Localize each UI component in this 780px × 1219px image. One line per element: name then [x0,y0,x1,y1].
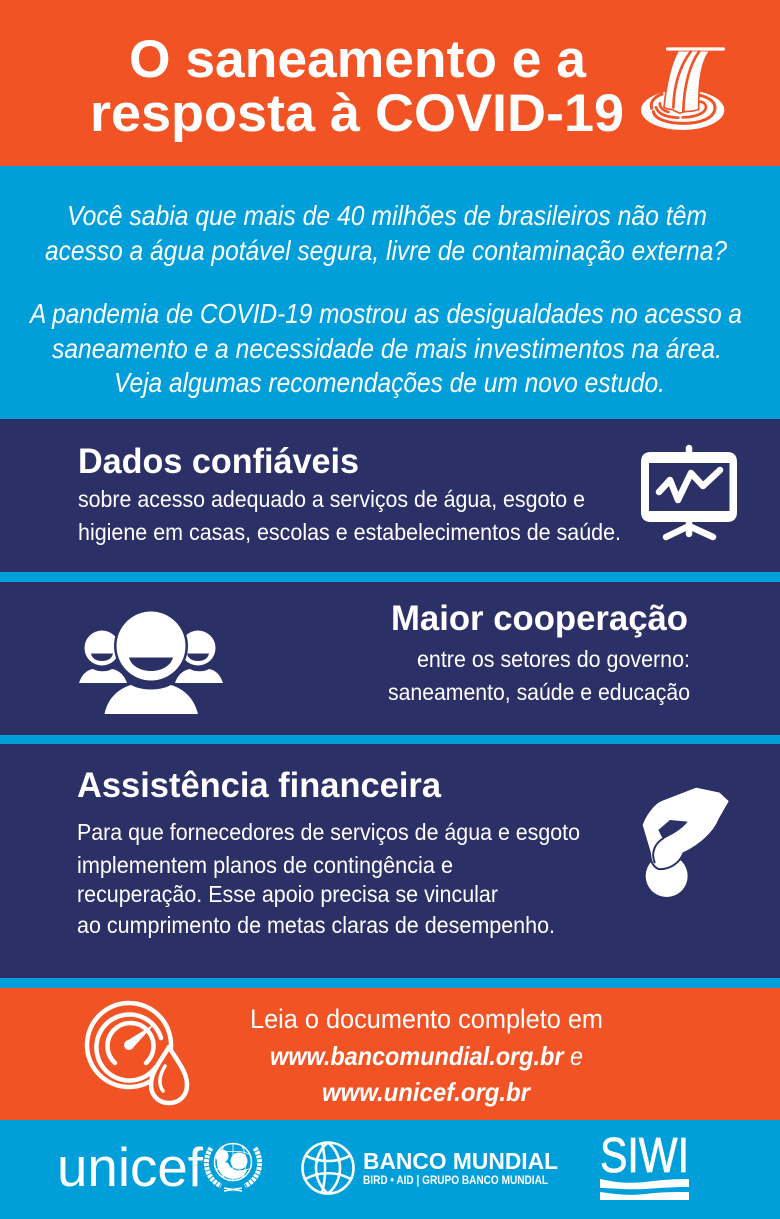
logo: unicef: unicef [57,1136,204,1198]
call to action text: www.bancomundial.org.br e [270,1041,583,1071]
intro text: Veja algumas recomendações de um novo estudo. [114,367,665,398]
icon: world bank globe [302,1142,354,1194]
logo: banco mundial: BIRD • AID | GRUPO BANCO MUNDIAL [363,1175,548,1187]
call to action text [250,1004,603,1107]
icon: gauge and water drop [87,1003,187,1103]
logo: SIWI [600,1129,689,1200]
title: O saneamento e a [129,30,587,89]
text: dados confiáveis: higiene em casas, escolas e estabelecimentos de saúde. [78,519,621,545]
text: assistência financeira: ao cumprimento de metas claras de desempenho. [77,912,555,938]
header panel [0,0,780,166]
panel: assistência financeira [0,744,780,978]
heading: assistência financeira: Assistência financeira [77,766,442,805]
panel: dados confiáveis [0,419,780,572]
icon: people [79,609,223,714]
panel: read more [0,988,780,1120]
intro text: saneamento e a necessidade de mais investimentos na área. [52,333,722,364]
heading: maior cooperação: Maior cooperação [391,599,688,638]
icon: presentation chart [641,448,737,537]
icon: waterfall [641,47,725,130]
text: dados confiáveis: sobre acesso adequado a serviços de água, esgoto e [78,486,585,512]
panel: maior cooperação [0,582,780,735]
title: resposta à COVID-19 [90,84,624,143]
text: assistência financeira: Para que fornecedores de serviços de água e esgoto [77,819,580,845]
logo: banco mundial [302,1142,558,1194]
text: maior cooperação: entre os setores do governo: [417,646,690,672]
logo: banco mundial: BANCO MUNDIAL [363,1148,558,1174]
text: dados confiáveis [78,486,621,545]
text: maior cooperação: saneamento, saúde e educação [388,679,690,705]
text: assistência financeira [77,819,580,938]
intro text: Você sabia que mais de 40 milhões de brasileiros não têm [67,200,707,231]
text: assistência financeira: implementem planos de contingência e [77,852,453,878]
call to action text: www.unicef.org.br [322,1077,532,1107]
text: assistência financeira: recuperação. Esse apoio precisa se vincular [77,881,498,907]
icon: unicef emblem [206,1144,260,1191]
intro text [28,200,742,398]
title [90,30,624,143]
icon: hand with coin [642,787,730,897]
logo: SIWI: SIWI [600,1129,689,1183]
call to action text: Leia o documento completo em [250,1004,603,1034]
heading: dados confiáveis: Dados confiáveis [78,442,359,481]
text: maior cooperação [388,646,690,705]
